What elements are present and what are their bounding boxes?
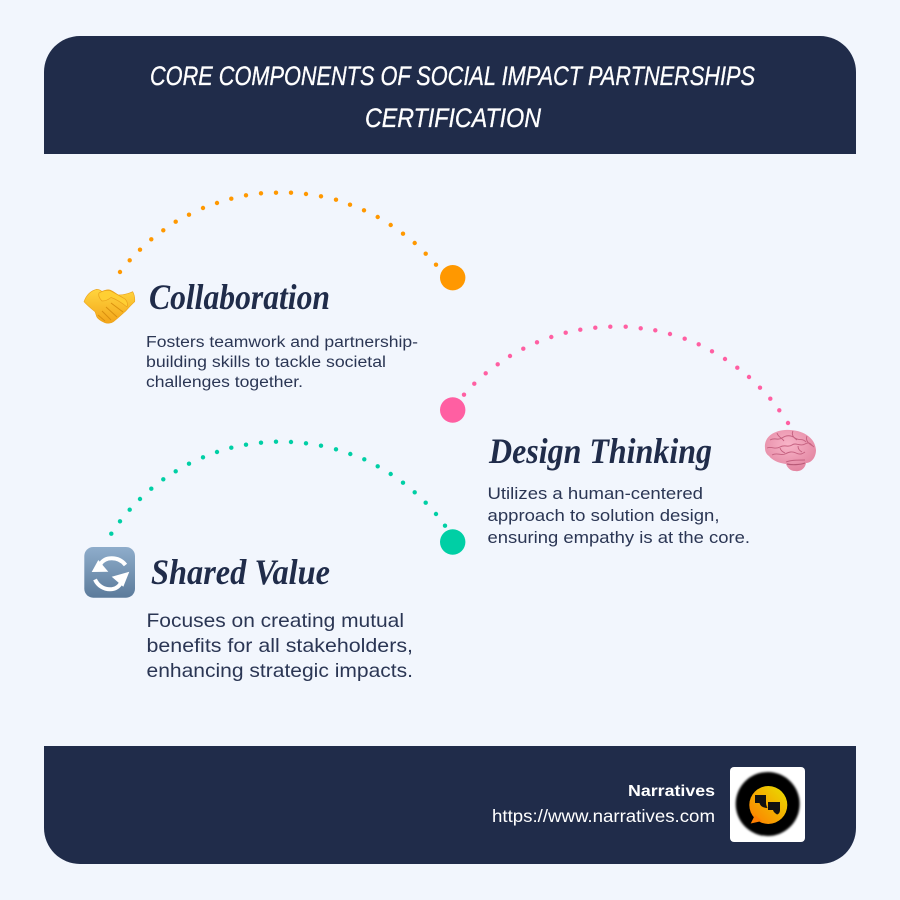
footer banner	[44, 746, 856, 864]
icon: handshake	[84, 289, 135, 323]
text: design thinking description	[488, 484, 750, 547]
text: collaboration description: Fosters teamwork and partnership-	[146, 334, 418, 351]
dotted arc: collaboration	[118, 190, 438, 274]
heading: shared value: Shared Value	[151, 552, 330, 592]
text: collaboration description: challenges together.	[146, 374, 303, 391]
text: shared value description: Focuses on creating mutual	[146, 610, 404, 632]
text: shared value description: benefits for all stakeholders,	[146, 635, 413, 657]
title: CORE COMPONENTS OF SOCIAL IMPACT PARTNERSHIPS	[150, 61, 755, 91]
heading: design thinking: Design Thinking	[488, 431, 712, 471]
panel: shared value	[84, 440, 465, 682]
text: design thinking description: Utilizes a human-centered	[488, 484, 703, 503]
panel: design thinking	[440, 324, 816, 547]
text: collaboration description: building skills to tackle societal	[146, 354, 386, 371]
node: orange circle	[440, 265, 465, 290]
title	[150, 61, 755, 133]
heading: collaboration: Collaboration	[149, 277, 330, 317]
icon: brain	[765, 430, 816, 471]
text: collaboration description	[146, 334, 418, 391]
panel: collaboration	[84, 190, 465, 391]
text: shared value description	[146, 610, 413, 682]
dotted arc: shared value	[109, 440, 447, 536]
header banner	[44, 36, 856, 154]
text: shared value description: enhancing strategic impacts.	[146, 660, 413, 682]
logo	[730, 767, 805, 842]
brand url: https://www.narratives.com	[492, 806, 715, 826]
title: CERTIFICATION	[365, 103, 541, 133]
text: design thinking description: ensuring empathy is at the core.	[488, 528, 750, 547]
node: green circle	[440, 529, 465, 555]
icon: refresh arrows	[84, 547, 135, 598]
text: design thinking description: approach to solution design,	[488, 506, 720, 525]
dotted arc: design thinking	[462, 324, 790, 425]
brand name: Narratives	[628, 783, 715, 800]
node: pink circle	[440, 397, 465, 423]
